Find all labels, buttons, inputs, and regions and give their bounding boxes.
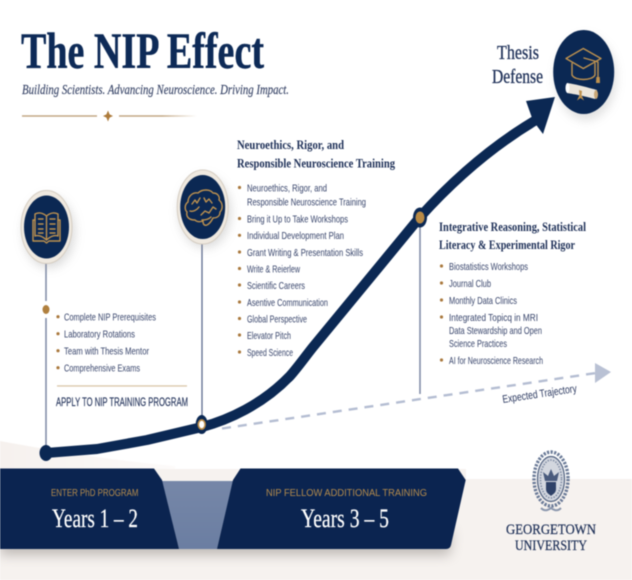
funnel connector between bands xyxy=(162,481,233,549)
curve node 2 xyxy=(196,415,208,434)
text block: responsible training list: Responsible Neuroscience Training xyxy=(247,196,366,208)
icon: open book xyxy=(21,190,75,268)
band: years 1-2 xyxy=(0,468,179,549)
heading: integrative reasoning: Literacy & Experimental Rigor xyxy=(439,237,575,252)
curve node 3 xyxy=(413,208,427,228)
text block: responsible training list: Asentive Communication xyxy=(247,297,328,309)
icon: brain xyxy=(177,170,231,248)
thesis defense label: Defense xyxy=(492,66,543,88)
text block: integrative reasoning list: Integrated Topicq in MRI xyxy=(449,312,538,324)
text block: years 1-2 checklist: Comprehensive Exams xyxy=(64,362,140,374)
band: years 1-2: Years 1 – 2 xyxy=(52,503,138,533)
apply callout xyxy=(56,385,188,409)
timeline stem: years 1-2 xyxy=(42,264,50,450)
icon: graduation cap and diploma xyxy=(553,30,616,120)
background floor xyxy=(0,441,632,580)
text block: integrative reasoning list: Journal Club xyxy=(449,278,491,290)
heading: responsible training: Neuroethics, Rigor, and xyxy=(237,137,345,152)
heading: integrative reasoning xyxy=(439,219,586,252)
thesis defense label xyxy=(492,42,543,88)
band: years 1-2: ENTER PhD PROGRAM xyxy=(51,487,138,499)
heading: integrative reasoning: Integrative Reasoning, Statistical xyxy=(439,219,586,234)
text block: responsible training list: Grant Writing & Presentation Skills xyxy=(247,247,363,259)
text block: responsible training list: Global Perspective xyxy=(247,313,307,325)
thesis defense label: Thesis xyxy=(497,42,539,64)
text block: responsible training list: Speed Science xyxy=(247,347,293,359)
text block: responsible training list: Neuroethics, Rigor, and xyxy=(247,182,327,194)
text block: integrative reasoning list xyxy=(440,261,543,367)
text block: integrative reasoning list: Biostatistics Workshops xyxy=(449,261,528,273)
text block: responsible training list: Write & Reierlew xyxy=(247,263,300,275)
band shadow xyxy=(0,530,452,555)
text block: responsible training list: Scientific Careers xyxy=(247,280,305,292)
georgetown seal xyxy=(534,452,568,510)
expected trajectory dashed arrow xyxy=(222,363,611,428)
text block: integrative reasoning list: AI for Neuroscience Research xyxy=(449,355,543,367)
text block: responsible training list xyxy=(238,182,366,359)
apply callout: APPLY TO NIP TRAINING PROGRAM xyxy=(56,397,188,409)
title: The NIP Effect xyxy=(21,24,264,80)
band: years 3-5: NIP FELLOW ADDITIONAL TRAINING xyxy=(266,487,427,499)
heading: responsible training: Responsible Neuroscience Training xyxy=(237,156,395,170)
timeline stem: years 3 xyxy=(201,244,203,420)
georgetown wordmark: GEORGETOWN xyxy=(506,522,596,538)
text block: integrative reasoning list: Monthly Data Clinics xyxy=(449,295,517,307)
subtitle: Building Scientists. Advancing Neuroscience. Driving Impact. xyxy=(22,83,289,98)
heading: responsible training xyxy=(237,137,395,170)
band: years 3-5: Years 3 – 5 xyxy=(301,503,389,533)
text block: integrative reasoning list: Data Stewardship and Open xyxy=(449,325,542,337)
timeline stem: years 4 xyxy=(419,217,421,394)
text block: integrative reasoning list: Science Practices xyxy=(449,338,507,350)
georgetown wordmark xyxy=(506,522,596,554)
text block: years 1-2 checklist: Team with Thesis Mentor xyxy=(64,346,149,358)
title divider xyxy=(22,110,197,122)
text block: responsible training list: Bring it Up to Take Workshops xyxy=(247,213,348,225)
text block: years 1-2 checklist: Laboratory Rotations xyxy=(64,328,135,340)
expected trajectory label: Expected Trajectory xyxy=(502,383,578,406)
text block: years 1-2 checklist: Complete NIP Prerequisites xyxy=(64,312,156,324)
text block: years 1-2 checklist xyxy=(56,312,156,374)
band: years 3-5 xyxy=(217,468,466,549)
georgetown wordmark: UNIVERSITY xyxy=(515,538,587,554)
growth curve arrow xyxy=(40,97,555,461)
text block: responsible training list: Individual Development Plan xyxy=(247,230,344,242)
text block: responsible training list: Elevator Pitch xyxy=(247,330,291,342)
